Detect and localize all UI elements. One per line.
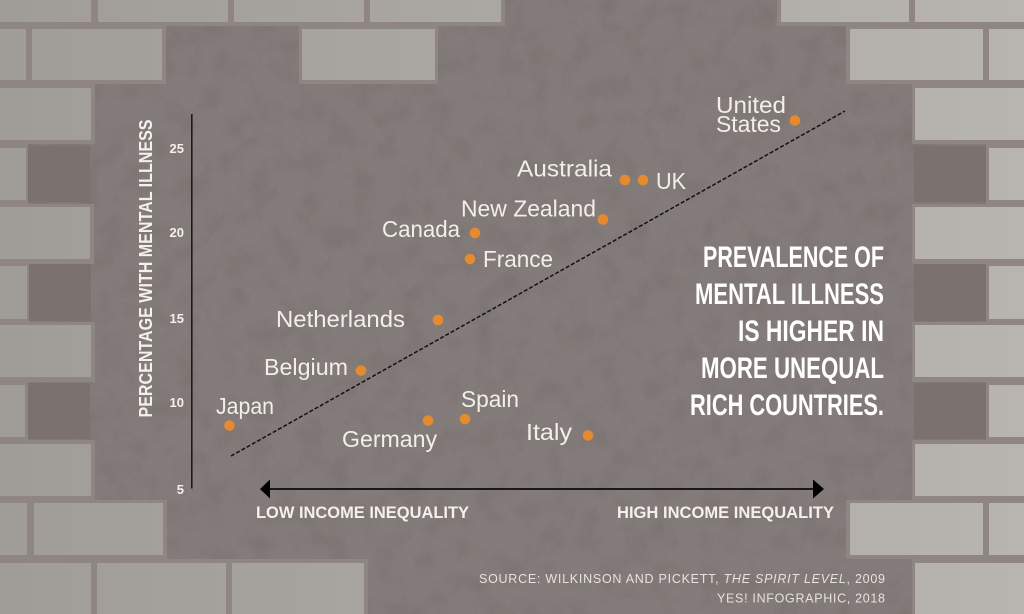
y axis title: PERCENTAGE WITH MENTAL ILLNESS: [136, 120, 156, 418]
y axis line: [191, 114, 193, 488]
headline: MENTAL ILLNESS: [695, 278, 884, 311]
bricks: right wall: [781, 0, 1024, 614]
country labels: Canada: [382, 216, 461, 242]
scatter points: [224, 115, 800, 441]
country labels: United: [716, 92, 786, 118]
headline: MORE UNEQUAL: [701, 352, 884, 385]
country labels: Italy: [526, 419, 572, 445]
bricks: left and top wall: [0, 0, 501, 614]
country labels: UK: [656, 168, 686, 194]
source credit: YES! INFOGRAPHIC, 2018: [717, 592, 885, 606]
country labels: States: [716, 111, 781, 137]
y axis tick labels: 5: [177, 482, 184, 497]
x axis label: low: LOW INCOME INEQUALITY: [256, 504, 469, 522]
country labels: New Zealand: [461, 196, 596, 222]
headline: [690, 241, 884, 422]
source credit: SOURCE: WILKINSON AND PICKETT, THE SPIRIT LEVEL, 2009: [479, 572, 885, 586]
country labels: France: [483, 246, 553, 272]
trend line: [231, 111, 845, 456]
country labels: Belgium: [264, 354, 348, 380]
country labels: Spain: [461, 386, 519, 412]
y axis: [170, 114, 193, 497]
y axis tick labels: 25: [170, 141, 184, 156]
country labels: Australia: [517, 156, 613, 182]
country labels: Germany: [342, 426, 437, 452]
y axis tick labels: 20: [170, 225, 184, 240]
headline: RICH COUNTRIES.: [690, 389, 884, 422]
x axis label: high: HIGH INCOME INEQUALITY: [617, 504, 834, 522]
y axis tick labels: [170, 141, 184, 497]
source credit: [479, 572, 885, 606]
country labels: Netherlands: [276, 306, 405, 332]
headline: IS HIGHER IN: [738, 315, 884, 348]
y axis tick labels: 10: [170, 395, 184, 410]
x axis double arrow: [260, 480, 824, 498]
headline: PREVALENCE OF: [703, 241, 884, 274]
recessed gaps between bricks: [28, 146, 987, 439]
y axis tick labels: 15: [170, 311, 184, 326]
country labels: Japan: [216, 393, 274, 419]
country labels: [216, 92, 786, 452]
